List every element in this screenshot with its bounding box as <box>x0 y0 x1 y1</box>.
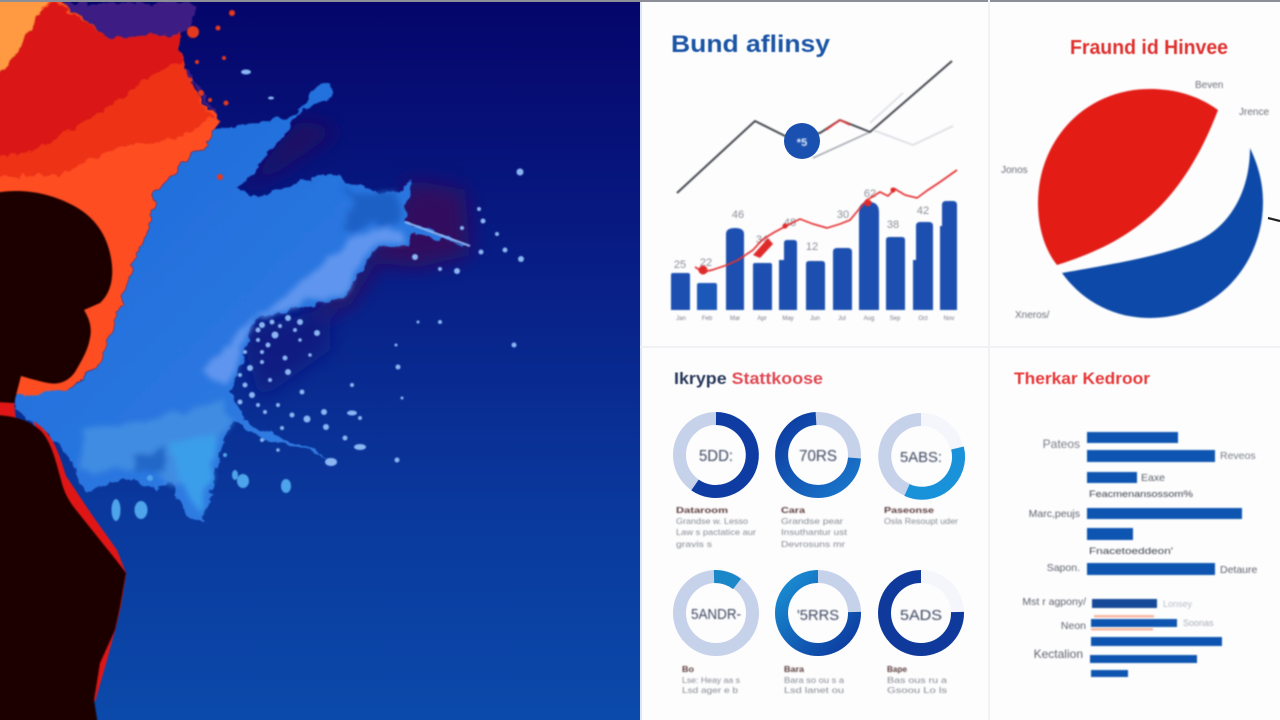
bar labels: Kectalion <box>1034 647 1083 661</box>
icon: blue circle marker <box>784 123 820 159</box>
donut captions: Osla Resoupt uder <box>884 516 958 526</box>
donut captions: Bas ous ru a <box>887 675 947 685</box>
donut captions: Lsd ager e b <box>682 685 738 695</box>
pie: blue segment <box>1062 148 1263 318</box>
donut captions: Lsd lanet ou <box>784 685 844 695</box>
pie: red segment <box>1038 89 1218 265</box>
donut captions: Paseonse <box>884 505 934 515</box>
line chart <box>677 61 953 193</box>
purple spray at top <box>60 3 218 118</box>
donut 5 <box>782 576 855 650</box>
pie labels <box>1001 80 1269 321</box>
donut captions: Cara <box>781 505 805 515</box>
bar labels: Marc,peujs <box>1029 508 1080 520</box>
bar labels: Eaxe <box>1141 472 1165 484</box>
donut 2: 70RS <box>799 448 837 465</box>
bar labels: Lonsey <box>1163 599 1193 609</box>
donut 5: '5RRS <box>797 607 839 624</box>
panel: brand pie chart <box>1001 37 1280 321</box>
pie labels: Xneros/ <box>1015 310 1050 321</box>
bar labels: Feacmenansossom% <box>1089 489 1193 499</box>
bar labels: Fnacetoeddeon' <box>1089 546 1173 556</box>
donut captions: Bara so ou s a <box>784 675 844 685</box>
orange stripes behind bar <box>1091 615 1154 630</box>
bar value labels: 38 <box>887 219 899 231</box>
donut 2 <box>782 418 854 492</box>
pie labels: Jrence <box>1239 107 1269 118</box>
x-axis labels: Nov <box>944 316 954 322</box>
bar labels: Soonas <box>1183 618 1214 628</box>
donut 3 <box>885 419 959 493</box>
donut captions: Lse: Heay aa s <box>682 675 740 685</box>
bar value labels: 12 <box>806 241 818 253</box>
pie labels: Beven <box>1195 80 1223 91</box>
donut captions: Bara <box>784 664 804 674</box>
bar labels: Sapon. <box>1047 562 1080 574</box>
bar value labels: 25 <box>674 259 686 271</box>
x-axis labels: Mar <box>730 316 740 322</box>
donut captions: Dataroom <box>676 505 729 515</box>
bar value labels: 34 <box>756 234 768 246</box>
donut 1 <box>680 418 752 492</box>
splatter dots red <box>187 10 235 180</box>
bar value labels: 30 <box>837 209 849 221</box>
donut captions: Devrosuns mr <box>781 539 845 549</box>
pie labels: Jonos <box>1001 165 1028 176</box>
bottom drops <box>112 453 291 521</box>
bar value labels <box>674 188 929 271</box>
heading: donuts: Ikrype Stattkoose <box>674 370 823 388</box>
panel: brand affinity charts <box>671 31 957 322</box>
donut captions: Grandse pear <box>781 516 843 526</box>
streak from splash <box>405 222 470 246</box>
bar labels: Pateos <box>1043 437 1080 451</box>
bar value labels: 22 <box>700 257 712 269</box>
x-axis labels: Feb <box>702 316 713 322</box>
red markers on trend <box>698 188 896 274</box>
donut captions: Bo <box>682 664 694 674</box>
donut captions: Law s pactatice aur <box>676 527 756 537</box>
lighter washes in splash <box>80 190 405 512</box>
bar labels: Neon <box>1061 620 1086 632</box>
horizontal bars <box>1087 432 1242 677</box>
bar labels: Detaure <box>1220 564 1258 576</box>
donut captions: gravis s <box>676 539 712 549</box>
panel: horizontal bar chart <box>1014 370 1258 677</box>
bar value labels: 62 <box>864 188 876 200</box>
panel: key statistics donuts <box>674 370 959 695</box>
red trend line <box>695 170 957 272</box>
light splatter <box>238 70 524 466</box>
pie leader stroke <box>1268 218 1280 221</box>
x-axis labels: Jul <box>838 316 846 322</box>
x-axis labels: Apr <box>757 316 767 322</box>
donut captions <box>676 505 958 695</box>
bar chart <box>671 201 957 310</box>
donut 6 <box>884 576 958 650</box>
x-axis labels <box>676 316 954 322</box>
silhouette: person <box>0 191 126 720</box>
bar labels <box>1022 437 1258 661</box>
donut 6: 5ADS <box>900 607 942 624</box>
x-axis labels: Jun <box>810 316 820 322</box>
bar value labels: 46 <box>732 209 744 221</box>
heading: pie chart: Fraund id Hinvee <box>1070 37 1228 59</box>
x-axis labels: Aug <box>864 316 874 322</box>
x-axis labels: Oct <box>918 316 928 322</box>
donut captions: Grandse w. Lesso <box>676 516 748 526</box>
donut captions: Bape <box>887 664 907 674</box>
bar labels: Mst r agpony/ <box>1022 596 1086 608</box>
donut 4: 5ANDR- <box>691 606 741 623</box>
donut 1: 5DD: <box>699 448 733 465</box>
dark purple shadows <box>240 120 470 400</box>
red splash <box>0 0 220 400</box>
panel: splash artwork <box>0 0 640 720</box>
donut captions: Insuthantur ust <box>781 527 848 537</box>
blue splash <box>14 83 469 522</box>
x-axis labels: Jan <box>676 316 686 322</box>
x-axis labels: May <box>782 316 794 322</box>
x-axis labels: Sep <box>890 316 901 322</box>
bar value labels: 42 <box>917 205 929 217</box>
donut 4 <box>680 576 752 650</box>
heading: brand affinity: Bund aflinsy <box>671 31 831 58</box>
heading: bars: Therkar Kedroor <box>1014 370 1151 388</box>
donut captions: Gsoou Lo ls <box>887 685 947 695</box>
icon: blue circle marker: *5 <box>797 137 807 149</box>
bar value labels: 48 <box>784 217 796 229</box>
bar labels: Reveos <box>1220 450 1256 462</box>
donut 3: 5ABS: <box>900 449 942 466</box>
